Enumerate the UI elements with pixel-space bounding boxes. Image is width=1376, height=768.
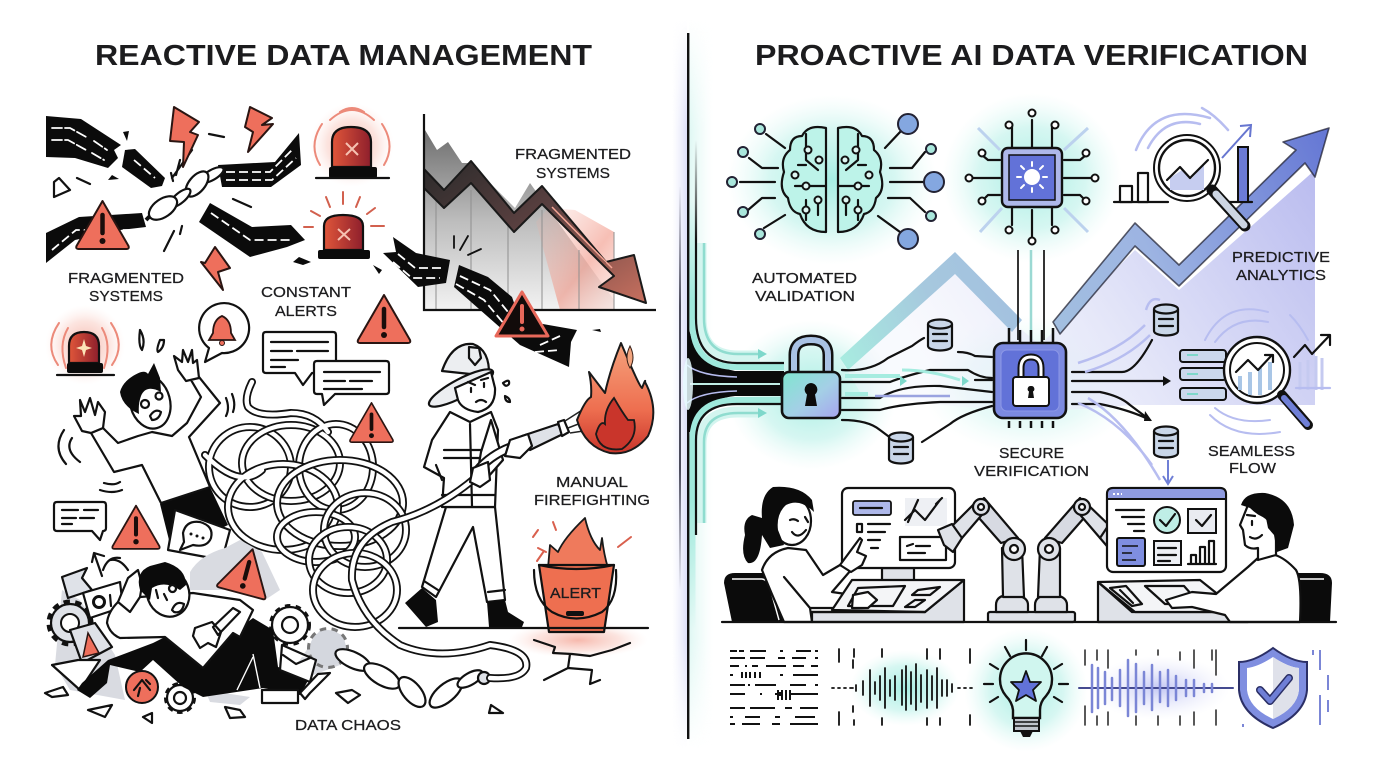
scene ground (722, 621, 1336, 623)
hair (743, 487, 814, 563)
up arrows (92, 553, 128, 576)
server and magnifier (1180, 309, 1330, 434)
bucket body (539, 565, 614, 632)
alert bucket (399, 518, 648, 684)
console left (812, 580, 964, 622)
warning triangle left low (112, 506, 160, 549)
warning triangle center (358, 295, 410, 343)
right arm (1038, 548, 1060, 597)
flow lines between locks (842, 338, 992, 442)
label: fragmented systems right: SYSTEMS (536, 165, 610, 182)
hair (1241, 493, 1294, 552)
label: constant alerts: ALERTS (275, 303, 337, 320)
outgoing flows (1072, 299, 1173, 484)
analytics magnifier top (1114, 108, 1252, 226)
lightning bolts (170, 107, 273, 290)
fragments and sparks (54, 127, 251, 251)
legs (422, 507, 505, 602)
label: seamless flow: SEAMLESS (1208, 443, 1295, 460)
broken road lower with warning (383, 236, 577, 367)
flow arrows (758, 349, 767, 418)
man at console (1166, 493, 1300, 622)
center divider (687, 33, 689, 739)
dark warning triangle (496, 292, 548, 336)
torn paper (62, 568, 92, 598)
ground and cracks (399, 627, 648, 629)
gray patches (55, 540, 345, 705)
label: manual firefighting: MANUAL (556, 474, 628, 491)
smile (790, 517, 808, 536)
label: constant alerts: CONSTANT (261, 284, 351, 301)
facial features (1247, 515, 1262, 539)
bucket text: ALERT (550, 585, 601, 602)
chart red area (536, 208, 614, 310)
console right (1098, 580, 1248, 622)
label: constant alerts (261, 284, 351, 320)
helmet (442, 344, 489, 376)
lower black line (696, 404, 784, 535)
bulb (984, 640, 1068, 737)
face (156, 585, 184, 612)
label: automated validation: VALIDATION (755, 288, 855, 305)
label: fragmented systems right (515, 146, 631, 182)
ai chip (966, 110, 1098, 244)
raised arm hand (118, 570, 142, 612)
label: secure verification: VERIFICATION (974, 463, 1089, 480)
arm to nozzle (478, 420, 503, 477)
alert rays (533, 522, 631, 561)
monitor right (1107, 488, 1226, 572)
label: secure verification: SECURE (999, 445, 1064, 462)
rubble pile (50, 540, 346, 711)
neural connectors (740, 131, 925, 232)
collapsed man (45, 543, 503, 723)
panel background: reactive side (0, 0, 688, 768)
label: fragmented systems left (68, 270, 184, 305)
legs (77, 618, 310, 698)
spray (565, 405, 594, 433)
scared man (58, 330, 234, 552)
pointing hand (840, 538, 866, 572)
torso and arms (91, 377, 220, 503)
brain (727, 114, 944, 249)
hose up to nozzle (478, 443, 525, 470)
secure chip (994, 250, 1066, 428)
panel: fragmented roads (46, 107, 601, 332)
waveform teal (832, 649, 972, 725)
alarm left (45, 305, 125, 385)
lower arm and hand (193, 608, 240, 648)
lower soft channel (701, 412, 760, 523)
speech bubbles (263, 332, 389, 405)
road segment 2 (122, 149, 165, 188)
label: seamless flow: FLOW (1229, 460, 1277, 477)
upper teal band (692, 200, 784, 367)
chart gray area (425, 130, 614, 310)
note bubble left (54, 502, 106, 540)
head (124, 371, 176, 433)
label: fragmented systems left: FRAGMENTED (68, 270, 184, 287)
black converge (688, 322, 784, 432)
road segment top left (46, 116, 121, 168)
warning triangle on hoses (350, 403, 393, 442)
label: manual firefighting: FIREFIGHTING (534, 492, 650, 509)
feet (262, 673, 330, 703)
main hose (352, 405, 594, 678)
motion marks (58, 330, 234, 492)
lower inner teal (704, 413, 760, 523)
dashes blue (1243, 650, 1328, 727)
lock left (782, 340, 840, 418)
label: fragmented systems left: SYSTEMS (89, 288, 163, 305)
label: predictive analytics: ANALYTICS (1236, 267, 1326, 284)
shield (1239, 648, 1307, 728)
chart: falling trend (424, 114, 656, 310)
label: fragmented systems right: FRAGMENTED (515, 146, 631, 163)
monitor left (842, 488, 955, 582)
warning triangle left (76, 201, 129, 249)
label: predictive analytics: PREDICTIVE (1232, 249, 1330, 266)
lower teal band (692, 400, 784, 630)
hair (139, 562, 186, 600)
chair left (724, 573, 786, 622)
label: manual firefighting (534, 474, 650, 509)
glove (505, 434, 532, 458)
waveform blue (1079, 650, 1233, 725)
gear left (50, 603, 90, 643)
workplace scene (722, 487, 1336, 622)
label: predictive analytics (1232, 249, 1330, 284)
card lower left (52, 660, 100, 690)
fire (577, 343, 653, 453)
label: seamless flow (1208, 443, 1295, 477)
chat card (168, 510, 230, 560)
chain bottom (332, 645, 490, 713)
alarm middle (304, 192, 384, 259)
gear right (272, 607, 308, 643)
legs (160, 487, 228, 552)
boots (405, 588, 524, 627)
upper inner teal (704, 243, 760, 354)
chart gridlines (436, 190, 614, 310)
chair right (1274, 573, 1332, 622)
warning triangle tilted (217, 543, 277, 600)
left hand (74, 398, 105, 433)
left arm (1002, 548, 1024, 597)
base (988, 612, 1075, 622)
fragment shards (108, 131, 601, 332)
gear gray (310, 630, 346, 666)
left flow lines (683, 140, 784, 630)
chart axes (424, 114, 656, 310)
torso and arm (1166, 555, 1300, 622)
gear bottom (167, 685, 193, 711)
coat (424, 412, 498, 507)
right hand (174, 350, 199, 381)
warning card (70, 623, 112, 663)
title: proactive: PROACTIVE AI DATA VERIFICATION (755, 40, 1308, 72)
panel background: proactive side glow (672, 20, 1230, 752)
bell bubble (199, 303, 249, 362)
road segment top right (218, 133, 301, 187)
road segment middle (199, 203, 305, 257)
label: secure verification (974, 445, 1089, 480)
title: reactive: REACTIVE DATA MANAGEMENT (95, 40, 592, 72)
center light lines (690, 383, 780, 385)
chart band arrow (424, 161, 646, 303)
binary dashes (730, 651, 818, 724)
area under rising arrow (840, 170, 1315, 410)
face (455, 372, 495, 412)
tangled hoses (205, 382, 406, 627)
gear card (83, 582, 123, 618)
road segment left (46, 213, 146, 263)
sweat (503, 381, 510, 402)
nozzle (522, 424, 563, 450)
label: automated validation (752, 270, 857, 305)
bucket flame (548, 518, 608, 568)
face (773, 497, 811, 545)
label: data chaos: DATA CHAOS (295, 717, 401, 734)
icon: databases (889, 304, 1178, 464)
face (141, 392, 162, 420)
robot arms (938, 498, 1127, 622)
upper black line (696, 140, 784, 363)
red disc (126, 671, 158, 703)
face (1240, 505, 1276, 560)
alarm top (310, 103, 394, 187)
label: automated validation: AUTOMATED (752, 270, 857, 287)
hair (120, 363, 161, 414)
mail card (280, 645, 316, 682)
torso (107, 593, 253, 668)
body (762, 548, 853, 622)
flow arrows cyan (900, 376, 969, 386)
upper soft channel (701, 243, 760, 356)
broken chain (145, 164, 226, 225)
debris (45, 687, 503, 723)
head (140, 563, 196, 623)
woman (743, 487, 866, 622)
firefighter (405, 344, 524, 627)
rising arrow (840, 128, 1329, 370)
